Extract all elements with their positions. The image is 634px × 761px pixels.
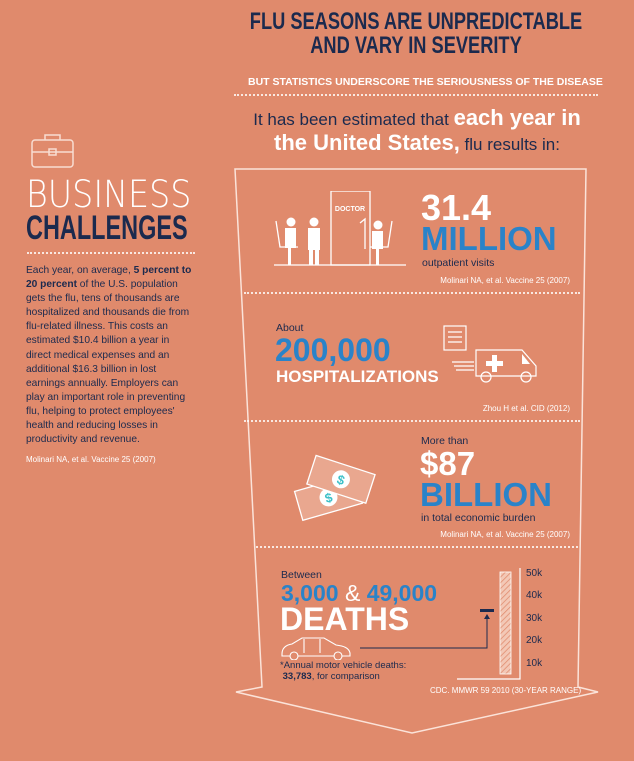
title (250, 8, 582, 59)
panel: hospitalizations (275, 322, 570, 413)
panel: outpatient visits: outpatient visits (422, 257, 494, 269)
intro text (253, 105, 581, 155)
panel: deaths: DEATHS (280, 601, 409, 637)
panel: economic burden: Molinari NA, et al. Vaccine 25 (2007) (440, 530, 570, 539)
panel: economic burden: More than (421, 435, 468, 447)
panel: deaths: *Annual motor vehicle deaths: (280, 660, 406, 671)
left panel: business challenges (26, 134, 195, 464)
icon: doctor waiting room: DOCTOR (335, 206, 365, 213)
panel: outpatient visits (274, 187, 570, 285)
panel: economic burden (294, 435, 570, 539)
chart: deaths range bar: 10k (526, 658, 543, 669)
chart: deaths range bar: 30k (526, 613, 543, 624)
panel: hospitalizations: HOSPITALIZATIONS (276, 367, 439, 386)
source: Molinari NA, et al. Vaccine 25 (2007) (26, 455, 156, 464)
chart: deaths range bar (360, 568, 543, 680)
heading: BUSINESS (26, 173, 191, 216)
panel: outpatient visits: Molinari NA, et al. Vaccine 25 (2007) (440, 276, 570, 285)
intro text: It has been estimated that each year in (253, 105, 581, 130)
stat: 31.4 (421, 187, 491, 228)
chart: deaths range bar: 40k (526, 590, 543, 601)
paragraph: Each year, on average, 5 percent to 20 percent of the U.S. population gets the flu, tens of thousands are hospitalized and thousands die from flu-related illness. This costs an estimated $10.4 billion a year in direct medical expenses and an additional $16.3 billion in lost earnings annually. Employers can play an important role in preventing flu, helping to protect employees' health and reducing losses in productivity and revenue. (26, 265, 191, 445)
panel: economic burden: $87 (420, 445, 475, 482)
title: FLU SEASONS ARE UNPREDICTABLE (250, 8, 582, 35)
panel: hospitalizations: 200,000 (275, 332, 391, 368)
icon: doctor waiting room (274, 191, 406, 266)
title: AND VARY IN SEVERITY (310, 32, 522, 59)
panel: deaths: 33,783, for comparison (283, 671, 380, 682)
panel: economic burden: in total economic burden (421, 512, 535, 524)
panel: hospitalizations: About (276, 322, 303, 334)
icon: money: $ (323, 489, 335, 506)
panel: deaths: CDC. MMWR 59 2010 (30-YEAR RANGE) (430, 686, 581, 695)
icon: money (294, 454, 376, 522)
panel: deaths (280, 568, 581, 695)
chart: deaths range bar: 20k (526, 635, 543, 646)
panel: outpatient visits: MILLION (421, 220, 557, 257)
icon: ambulance (443, 325, 537, 383)
icon: money: $ (335, 472, 347, 488)
icon: car (281, 638, 351, 660)
panel: economic burden: BILLION (420, 476, 552, 513)
panel: deaths: 3,000 & 49,000 (281, 580, 437, 606)
panel: hospitalizations: Zhou H et al. CID (2012) (483, 404, 570, 413)
chart: deaths range bar: 50k (526, 568, 543, 579)
intro text: the United States, flu results in: (274, 130, 560, 155)
subtitle: BUT STATISTICS UNDERSCORE THE SERIOUSNESS OF THE DISEASE (248, 76, 603, 88)
icon: briefcase (31, 134, 74, 168)
panel: deaths: Between (281, 569, 322, 581)
left panel: business challenges: CHALLENGES (26, 209, 188, 247)
